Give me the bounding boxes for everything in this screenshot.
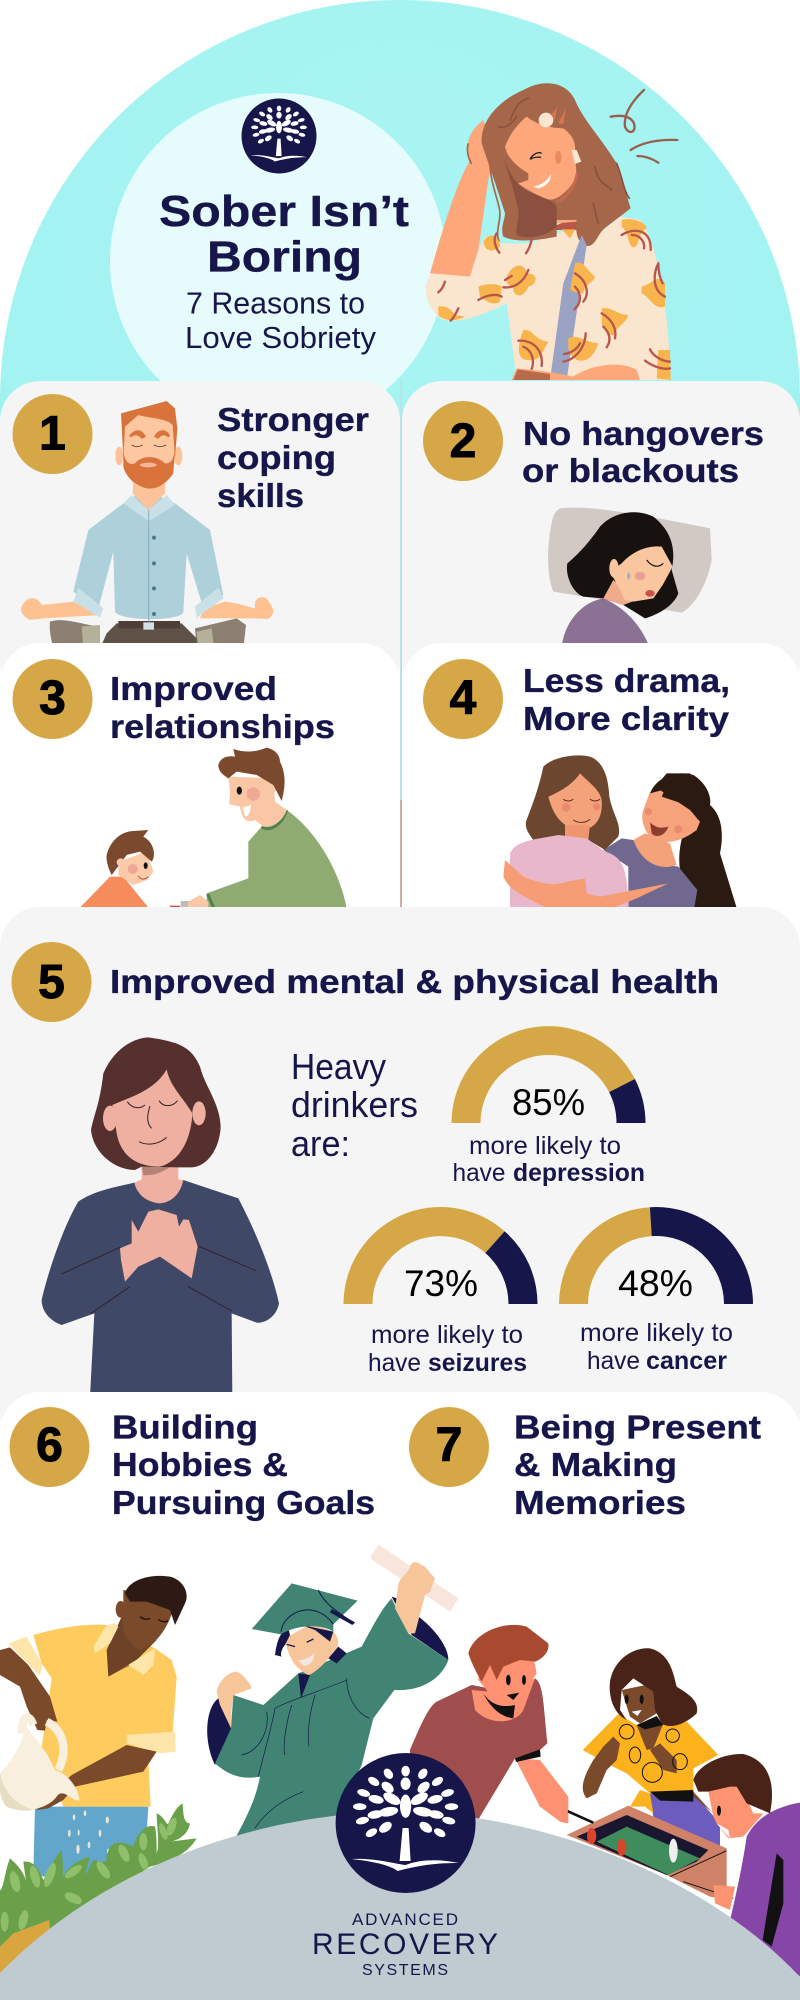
heading: stronger coping skills: Stronger — [217, 401, 369, 438]
heading: improved relationships: relationships — [110, 708, 335, 745]
heading: stronger coping skills: coping — [217, 439, 336, 476]
subtitle — [185, 286, 376, 355]
header arch background — [0, 0, 800, 420]
heading: stronger coping skills — [217, 401, 369, 514]
number badge 4 — [423, 659, 503, 739]
number badge 1 — [12, 394, 92, 474]
icon: tree logo top — [242, 98, 316, 174]
heading: no hangovers or blackouts: or blackouts — [522, 452, 739, 489]
heading: improved relationships — [110, 670, 335, 745]
number badge 4: 4 — [450, 672, 477, 725]
illustration: friends playing foosball — [410, 1625, 800, 1977]
gauge: 48% cancer: more likely to — [580, 1319, 733, 1347]
gauge: 73% seizures: 73% — [404, 1263, 478, 1304]
gauge: 85% depression: have — [452, 1159, 506, 1187]
heading: less drama, more clarity: More clarity — [523, 700, 730, 737]
heading: no hangovers or blackouts — [522, 415, 764, 489]
illustration: meditating man — [21, 401, 273, 648]
gauge: 85% depression: depression — [513, 1159, 645, 1187]
friend in purple hoodie — [693, 1754, 800, 1977]
heading: building hobbies and pursuing goals — [112, 1408, 375, 1521]
number badge 7: 7 — [436, 1419, 462, 1472]
heading: being present and making memories — [514, 1408, 761, 1521]
heading: stronger coping skills: skills — [217, 477, 304, 514]
number badge 2: 2 — [450, 415, 476, 468]
footer dome — [0, 1812, 800, 2000]
heading: no hangovers or blackouts: No hangovers — [523, 415, 764, 452]
panel: reason 5 — [0, 907, 800, 1452]
number badge 3 — [12, 659, 92, 739]
gauge: 73% seizures — [344, 1207, 538, 1377]
number badge 5: 5 — [38, 956, 65, 1009]
number badge 6 — [10, 1407, 90, 1487]
heading: being present and making memories: Memories — [514, 1484, 686, 1521]
gauge: 48% cancer: cancer — [646, 1347, 727, 1375]
text: heavy drinkers are: Heavy — [291, 1046, 386, 1087]
heading: being present and making memories: & Making — [514, 1446, 677, 1483]
text: heavy drinkers are — [291, 1046, 418, 1164]
text: heavy drinkers are: are: — [291, 1123, 350, 1164]
panel: reason 1 — [0, 381, 400, 701]
heading: less drama, more clarity — [523, 662, 730, 737]
gauge: 48% cancer: have — [587, 1347, 640, 1375]
brand wordmark — [312, 1910, 498, 1979]
heading: building hobbies and pursuing goals: Hobbies & — [112, 1446, 288, 1483]
number badge 3: 3 — [39, 672, 66, 725]
illustration: father and child — [76, 748, 347, 912]
title: Sober Isn’t — [159, 187, 409, 236]
brand wordmark: ADVANCED — [352, 1910, 458, 1929]
title: Boring — [207, 232, 362, 282]
panel: reason 4 — [402, 643, 800, 963]
number badge 1: 1 — [39, 408, 66, 460]
gauge: 48% cancer: 48% — [618, 1263, 693, 1304]
number badge 5 — [12, 942, 92, 1022]
gauge: 73% seizures: seizures — [428, 1349, 527, 1377]
number badge 6: 6 — [36, 1419, 63, 1472]
illustration: graduate — [207, 1544, 458, 1838]
panel: reason 3 — [0, 643, 400, 963]
gap line between upper cards — [400, 381, 402, 907]
foosball table — [538, 1795, 733, 1900]
illustration: sleeping woman — [548, 508, 712, 647]
heading: building hobbies and pursuing goals: Building — [112, 1408, 258, 1446]
gauge: 85% depression: more likely to — [469, 1132, 621, 1160]
friend in red shirt — [410, 1625, 568, 1843]
gauge: 85% depression — [452, 1026, 646, 1187]
number badge 7 — [409, 1407, 489, 1487]
illustration: man watering plants — [0, 1576, 197, 1977]
heading: improved mental and physical health: Improved mental & physical health — [110, 963, 719, 1000]
gauge: 73% seizures: more likely to — [371, 1321, 523, 1349]
gauge: 48% cancer — [559, 1207, 753, 1375]
heading: being present and making memories: Being Present — [514, 1408, 761, 1446]
friend in yellow top — [583, 1648, 720, 1847]
text: heavy drinkers are: drinkers — [291, 1084, 418, 1125]
subtitle: Love Sobriety — [185, 320, 376, 355]
brand wordmark: RECOVERY — [312, 1928, 498, 1961]
illustration: calm woman with hands on chest — [42, 1037, 279, 1397]
gauge: 85% depression: 85% — [512, 1082, 585, 1123]
brand wordmark: SYSTEMS — [362, 1962, 448, 1979]
heading: less drama, more clarity: Less drama, — [523, 662, 730, 699]
title — [159, 187, 409, 282]
gauge: 73% seizures: have — [368, 1349, 421, 1377]
header inner circle — [110, 93, 446, 429]
icon: tree logo bottom — [336, 1753, 476, 1893]
panel: reasons 6 and 7 — [0, 1392, 800, 2000]
number badge 2 — [423, 401, 503, 481]
panel: reason 2 — [402, 381, 800, 701]
heading: improved relationships: Improved — [110, 670, 277, 707]
heading: building hobbies and pursuing goals: Pursuing Goals — [112, 1484, 375, 1521]
illustration: two women hugging — [503, 755, 738, 913]
subtitle: 7 Reasons to — [186, 286, 365, 320]
illustration: laughing woman — [426, 83, 677, 380]
